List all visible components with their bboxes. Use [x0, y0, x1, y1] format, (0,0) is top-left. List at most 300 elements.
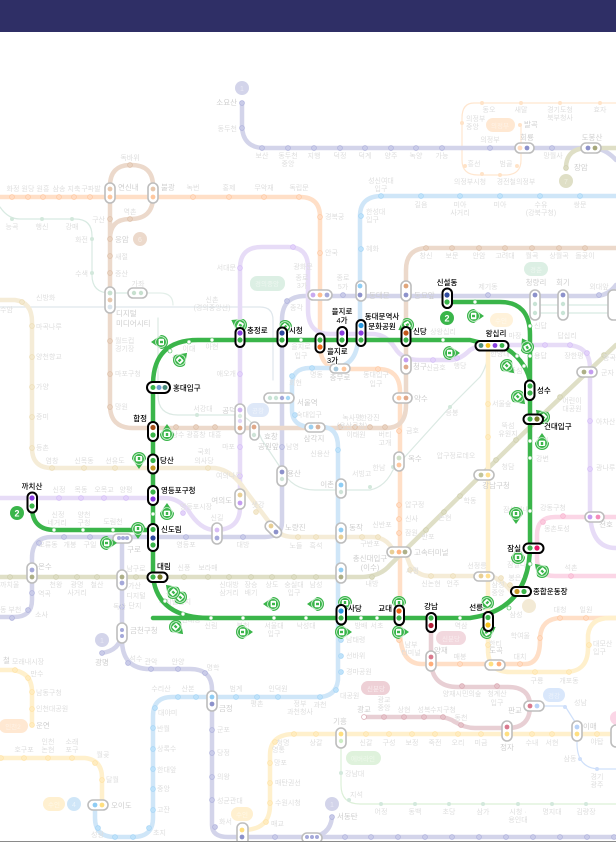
line 2 station names: 강남 — [424, 601, 438, 611]
faded station labels: 3가 — [297, 281, 308, 290]
faded station labels: 망포 — [274, 758, 287, 767]
faded station labels: 동작 — [349, 522, 363, 532]
faded station labels: 녹사평 — [342, 413, 362, 422]
faded station labels: 선정릉 — [467, 561, 487, 570]
faded station labels: 영등포시장 — [180, 502, 213, 511]
line 2 station names: 대림 — [157, 561, 171, 571]
faded station labels: 의왕 — [217, 772, 230, 781]
faded station labels: 상왕십리 — [430, 327, 456, 336]
faded station labels: 구청 — [78, 519, 90, 527]
faded station labels: (용산구청) — [337, 421, 367, 430]
faded line number badges and pills: 수인 — [236, 810, 248, 819]
faded station labels: 을지로 — [291, 342, 311, 351]
faded station labels: 중곡 — [603, 354, 616, 362]
faded station labels: 성균관대 — [217, 796, 243, 805]
faded line number badges and pills: 경강 — [548, 691, 560, 700]
faded station labels: 신촌 — [206, 295, 219, 304]
faded station labels: 증산 — [115, 269, 128, 278]
faded station labels: 망원 — [115, 402, 128, 411]
faded station labels: 학동 — [464, 496, 477, 505]
faded station labels: 신사 — [405, 514, 418, 523]
line 2 station names: 3가 — [327, 356, 338, 365]
faded station labels: 군포 — [217, 726, 230, 734]
faded station labels: 사거리 — [450, 208, 470, 217]
faded station labels: 보정 — [406, 738, 418, 747]
faded station labels: 광명 — [95, 657, 109, 667]
line 2 station names: 4가 — [336, 316, 348, 325]
faded station labels: 신대방 — [181, 615, 201, 624]
faded station labels: 수유 — [535, 201, 548, 209]
faded station labels: 보산 — [256, 151, 269, 160]
faded station labels: 모래내시장 — [12, 657, 45, 666]
faded station labels: 안암 — [473, 251, 486, 260]
line 2 station names — [22, 277, 572, 613]
faded station labels: 천호 — [599, 519, 613, 529]
line 2 main track — [32, 302, 530, 618]
faded station labels: 강변 — [536, 454, 549, 463]
faded station labels: 구파발 — [81, 184, 101, 193]
faded station labels: 입구 — [295, 352, 308, 360]
faded station labels: 논현 — [42, 746, 54, 754]
faded station labels: 창신 — [420, 251, 432, 260]
faded station labels: 학여울 — [511, 631, 531, 640]
bottom edge rule — [0, 841, 616, 842]
faded station labels: 화서 — [219, 817, 232, 826]
faded station labels: 도곡 — [489, 646, 503, 655]
faded station labels: 방배 — [355, 621, 367, 630]
faded station labels: 양평 — [120, 485, 132, 494]
faded station labels: 회룡 — [520, 133, 534, 142]
line 2 station names: 을지로 — [332, 307, 352, 316]
faded line number badges and pills: 공항 — [252, 406, 264, 415]
faded station labels: 봉천 — [237, 621, 249, 630]
faded station labels: 가능 — [436, 151, 449, 160]
faded station labels: 도림천 — [103, 517, 123, 526]
faded station labels: 오류동 — [38, 541, 58, 549]
faded station labels: 흑석 — [310, 541, 322, 550]
faded station labels: 숙대입구 — [296, 411, 322, 419]
line 2 station names: 당산 — [160, 455, 174, 465]
faded station labels: 독립문 — [289, 184, 309, 192]
faded station labels: 제기동 — [478, 282, 498, 291]
faded station labels: 약수 — [414, 393, 428, 403]
faded station labels: 서울역 — [297, 397, 318, 407]
faded station labels: 광명 — [71, 580, 83, 589]
faded station labels: 산본 — [182, 684, 195, 693]
faded station labels: 회현 — [289, 379, 302, 387]
faded station labels: 행당 — [454, 361, 467, 370]
faded station labels: 상록수 — [157, 744, 177, 753]
faded transfer stations — [27, 143, 616, 842]
faded station labels: 장한평 — [564, 351, 584, 360]
faded station labels: 구산 — [92, 215, 106, 224]
faded station labels: 어린이 — [562, 396, 582, 405]
faded station labels: 호구포 — [14, 746, 34, 754]
faded station labels: 중앙 — [492, 589, 505, 597]
faded station labels: 압구정로데오 — [437, 451, 476, 460]
faded station labels: 녹번 — [187, 183, 199, 192]
faded line number badges and pills: 4 — [72, 802, 76, 809]
faded station labels: 서울대 — [264, 621, 284, 630]
faded station labels: 동대입구 — [363, 371, 389, 379]
faded station labels: 중앙 — [378, 704, 391, 712]
faded station labels: 개포동 — [559, 676, 579, 685]
faded station labels: 강남대 — [345, 769, 364, 778]
faded station labels: 외대앞 — [589, 282, 609, 291]
faded station labels: 서강대 — [193, 404, 213, 413]
faded station labels: 신갈 — [360, 738, 373, 747]
faded station labels: 죽전 — [429, 738, 441, 747]
faded station labels: 청계산 — [487, 689, 507, 698]
faded station labels: 아차산 — [596, 417, 616, 426]
faded station labels: 용답 — [534, 351, 547, 360]
faded station labels: 역삼 — [455, 621, 468, 630]
faded station labels: 강동구청 — [540, 503, 566, 512]
header bar — [0, 0, 616, 32]
faded station labels: 홍제 — [223, 183, 235, 192]
faded station labels: 응봉 — [446, 409, 459, 417]
faded station labels: 이대 — [183, 344, 195, 353]
faded station labels: 석수 — [130, 654, 143, 663]
faded station labels: 신대방 — [219, 580, 239, 589]
faded station labels: 쌍문 — [574, 200, 587, 209]
faded station labels: 압구정 — [405, 500, 424, 509]
faded station labels: 신풍 — [178, 563, 191, 572]
faded station labels: 어정 — [375, 807, 387, 816]
faded line number badges and pills: 경춘 — [530, 265, 542, 274]
faded station labels: 대모산 — [593, 639, 613, 648]
faded station labels: 수지구청 — [430, 705, 456, 714]
faded station labels: 한양대 — [490, 350, 510, 358]
faded station labels: 사평 — [406, 566, 419, 575]
faded line number badges and pills: 경의중앙 — [255, 279, 279, 288]
faded station labels: 성복 — [418, 705, 431, 714]
faded station labels: 광흥창 — [186, 430, 206, 439]
faded station labels: 상수 — [172, 430, 185, 439]
faded station labels: 한남 — [373, 463, 386, 472]
faded station labels: 구로 — [166, 590, 179, 598]
faded station labels: 회기 — [556, 278, 570, 287]
faded station labels: 수원시청 — [275, 798, 301, 807]
line 2 station names: 잠실 — [507, 543, 521, 553]
faded station labels: 미금 — [475, 738, 488, 747]
faded station labels: 고잔 — [157, 805, 170, 814]
faded station labels: 남부 — [405, 640, 418, 649]
faded station labels: 인천대공원 — [36, 704, 68, 713]
faded station labels: 양천 — [78, 510, 90, 519]
line 2 badges: 2 — [444, 314, 450, 324]
faded line number badges and pills: 의정부 — [491, 121, 509, 130]
faded station labels: 청량리 — [526, 278, 546, 287]
faded station labels: 개봉 — [64, 540, 77, 549]
faded station labels: 신정 — [52, 510, 64, 519]
faded station labels: 종로 — [337, 274, 350, 282]
faded station labels: 동두천 — [218, 124, 237, 133]
line 2 station names: 시청 — [289, 326, 303, 335]
faded station labels: 원당 — [22, 184, 35, 193]
faded station labels: 삼각지 — [304, 433, 324, 443]
faded station labels: 낙성대 — [296, 621, 316, 630]
faded station labels: 대공원 — [340, 691, 359, 700]
faded station labels: 답십리 — [557, 331, 577, 340]
faded station labels: 과천 — [314, 700, 326, 709]
faded station labels: 한성대 — [366, 207, 385, 216]
line 2 station names: 신도림 — [161, 524, 182, 534]
faded station labels: 공덕 — [222, 405, 236, 415]
faded station labels: 마장 — [509, 331, 522, 340]
faded station labels: 명지대 — [542, 807, 562, 816]
faded station labels: 남성 — [310, 580, 322, 589]
faded station labels: 안국 — [325, 248, 338, 257]
faded station labels: 경기 — [591, 772, 603, 781]
faded station labels: 성신여대 — [368, 176, 394, 185]
faded station labels: 월곶 — [97, 750, 110, 759]
faded station labels: 일원 — [580, 605, 592, 614]
faded station labels: 충무로 — [330, 373, 350, 382]
faded station labels: 상월곡 — [549, 251, 569, 260]
faded station labels: 내방 — [366, 579, 379, 588]
faded station labels: 남동구청 — [36, 688, 62, 697]
faded station labels: 소사 — [35, 610, 48, 619]
faded station labels: 염창 — [46, 457, 59, 465]
faded station labels: 원흥 — [37, 184, 50, 193]
faded station labels: 언주 — [447, 579, 460, 588]
faded station labels: 월곡 — [526, 251, 539, 260]
faded station labels: 광나루 — [596, 463, 616, 472]
line 2 station names: 동대문역사 — [365, 311, 399, 321]
faded station labels: 까치울 — [0, 580, 20, 589]
faded station labels: 노량진 — [285, 522, 306, 532]
faded station labels: 뚝섬 — [510, 366, 522, 375]
faded station labels: 선유도 — [105, 456, 125, 465]
faded station labels: 상갈 — [310, 738, 323, 747]
faded station labels: 효창 — [264, 432, 278, 441]
faded station labels: 지행 — [308, 151, 320, 160]
faded station labels: 돌곶이 — [575, 251, 595, 260]
faded line number badges and pills: 1 — [100, 638, 104, 645]
faded station labels: 고속터미널 — [414, 548, 449, 557]
faded station labels: 입구 — [288, 589, 301, 597]
line 2 station names: 성수 — [537, 385, 551, 395]
faded station labels: 디지털단지 — [159, 597, 191, 606]
faded station labels: 도봉산 — [582, 132, 602, 142]
faded station labels: (경의중앙선) — [194, 303, 230, 312]
faded line number badges and pills: 에버라인 — [351, 754, 375, 763]
faded station labels: 포구 — [66, 746, 79, 754]
faded station labels: 마곡나루 — [36, 322, 62, 331]
line 2 station names: 홍대입구 — [173, 382, 201, 392]
faded station labels: 구룡 — [531, 677, 544, 685]
faded station labels: 서울숲 — [492, 399, 512, 408]
line 2 station names: 문화공원 — [368, 322, 396, 331]
faded station labels: 중앙 — [282, 160, 295, 168]
faded station labels: 논현 — [439, 514, 451, 522]
faded line number badges and pills: 수인 — [48, 800, 60, 809]
faded station labels: 총신대입구 — [353, 554, 387, 563]
faded station labels: 상현 — [398, 705, 410, 714]
faded station labels: 유원지 — [498, 429, 518, 438]
faded station labels: 신목동 — [74, 456, 94, 465]
faded station labels: (이수) — [361, 562, 380, 572]
faded station labels: 독산 — [113, 602, 126, 611]
faded station labels: 야탑 — [591, 737, 604, 746]
faded station labels: 동천 — [455, 713, 467, 722]
line 2 station names: 영등포구청 — [161, 485, 196, 495]
faded station labels: 뚝섬 — [502, 421, 514, 430]
faded station labels: 행신 — [36, 222, 48, 231]
faded station labels: 구성 — [383, 738, 395, 747]
faded station labels: (강북구청) — [526, 208, 556, 217]
faded station labels: 대야미 — [158, 708, 177, 717]
faded station labels: 미디어시티 — [116, 318, 150, 328]
faded station labels: 단지 — [129, 601, 141, 610]
faded station labels: 광화문 — [293, 263, 313, 271]
faded station labels: 역곡 — [38, 589, 51, 598]
faded station labels: 안양 — [172, 657, 185, 666]
line 2 badges: 2 — [14, 508, 20, 518]
faded station labels: 용산 — [287, 468, 301, 478]
faded station labels: 디지털 — [126, 591, 146, 600]
faded station labels: 평촌 — [251, 699, 264, 708]
faded station labels: 새절 — [115, 252, 128, 261]
faded station labels: 녹양 — [410, 152, 423, 160]
faded line number badges and pills: 7 — [564, 179, 568, 186]
faded station labels: 강매 — [66, 222, 78, 231]
faded station labels: 아현 — [206, 342, 218, 351]
transit pin icons — [100, 309, 553, 642]
faded station labels: 대방 — [237, 540, 250, 549]
faded station labels: 온수 — [38, 562, 52, 571]
line 2 small stations — [52, 300, 532, 620]
faded station labels: 네거리 — [47, 518, 67, 527]
faded station labels: 신림 — [205, 621, 217, 630]
faded station labels: 오이도 — [111, 800, 132, 810]
faded station labels: 지석 — [350, 790, 363, 799]
faded station labels: 반월 — [157, 724, 170, 733]
faded station labels: 한강진 — [360, 413, 380, 422]
faded station labels: 노들 — [290, 542, 303, 550]
faded station labels: 시청 · — [509, 808, 527, 816]
line 2 station names: 충정로 — [247, 325, 268, 335]
faded station labels: 서대문 — [217, 263, 237, 272]
faded station labels: 증미 — [36, 412, 49, 421]
faded station labels: 용인대 — [508, 815, 528, 824]
faded station labels: 이촌 — [320, 479, 334, 489]
faded station labels: 샛강 — [252, 500, 265, 509]
faded station labels: 서현 — [546, 738, 558, 747]
faded station labels: 군자 — [601, 368, 614, 377]
faded station labels: 터미널 — [401, 648, 421, 657]
faded station labels: 구로 — [127, 545, 141, 554]
faded station labels: 경복궁 — [325, 212, 345, 221]
faded station labels: 독바위 — [120, 153, 140, 162]
faded line number badges and pills: 신분당 — [367, 684, 385, 693]
faded station labels: 만수 — [31, 669, 44, 678]
faded station labels: 배기 — [245, 588, 257, 597]
faded station labels: 수암 — [0, 306, 13, 314]
faded station labels: 경기도청 — [547, 105, 573, 114]
faded station labels: 삼송 — [53, 184, 66, 193]
faded station labels: 매교 — [271, 820, 284, 828]
faded line number badges and pills: 1 — [240, 86, 244, 93]
line 2 station names: 신당 — [413, 326, 427, 336]
faded station labels: 신반포 — [372, 520, 392, 529]
faded station labels: 한대앞 — [157, 766, 177, 774]
faded station labels: 서동탄 — [337, 811, 358, 821]
faded station labels: 삼성 — [492, 580, 504, 589]
faded station labels: 목동 — [75, 486, 88, 494]
faded station labels: 신길 — [211, 513, 223, 522]
faded station labels: 의사당 — [194, 456, 214, 465]
faded station labels: 서초 — [371, 621, 384, 630]
faded station labels: 미아 — [454, 200, 467, 209]
faded station labels: 봉은사 — [508, 573, 528, 582]
faded station labels: 소래 — [66, 737, 78, 746]
faded station labels: 청구 — [413, 362, 427, 371]
faded station labels: 숭실대 — [284, 580, 304, 589]
faded station labels: 오리 — [452, 738, 464, 747]
faded station labels: 가양 — [36, 382, 49, 391]
faded station labels: 종로 — [296, 274, 309, 282]
faded station labels: 강남구청 — [482, 480, 510, 490]
faded station labels: 철산 — [91, 580, 104, 589]
faded station labels: 대공원 — [562, 404, 582, 413]
faded station labels: 이태원 — [346, 430, 366, 439]
line 2 station names: 선릉 — [469, 602, 483, 612]
faded station labels: 의정부 — [466, 114, 486, 123]
faded station labels: 인덕원 — [268, 684, 288, 693]
faded station labels: 서빙고 — [352, 469, 372, 478]
line 2 station names: 건대입구 — [544, 421, 572, 431]
faded station labels: 삼거리 — [219, 588, 239, 597]
faded station labels: 입구 — [370, 380, 383, 388]
faded station labels: 상도 — [266, 580, 279, 589]
faded station labels: 달월 — [106, 775, 119, 784]
faded station labels: 사거리 — [67, 588, 87, 597]
faded station labels: 잠원 — [405, 528, 418, 537]
faded station labels: 매봉 — [454, 653, 467, 661]
faded station labels: 신논현 — [421, 579, 441, 588]
faded station labels: 영등포 — [176, 540, 196, 549]
faded station labels: 동대문 — [369, 291, 390, 300]
faded station labels: 구의 — [536, 436, 549, 445]
faded station labels: 기흥 — [333, 716, 347, 726]
faded station labels: 동오 — [483, 106, 496, 114]
faded station labels: 입구 — [375, 185, 388, 193]
faded station labels: 화정 — [7, 184, 19, 193]
faded station labels: 범골 — [500, 159, 513, 168]
faded station labels: 옥수 — [408, 454, 422, 463]
faded station labels: 신정 — [53, 485, 65, 494]
faded line number badges and pills: 1 — [330, 802, 334, 809]
faded station labels: 역촌 — [124, 207, 137, 216]
faded station labels: 중앙 — [466, 123, 479, 131]
faded station labels: 남태령 — [346, 635, 365, 644]
faded station labels: 매탄권선 — [275, 778, 301, 787]
faded station labels: 양재 — [434, 646, 448, 655]
faded station labels: 인천 — [42, 737, 54, 746]
faded station labels: 신금호 — [426, 363, 446, 372]
faded station labels: 망월사 — [543, 151, 563, 160]
faded station labels: 한티 — [489, 639, 502, 648]
faded station labels: 덕계 — [359, 151, 371, 160]
faded station labels: 신답 — [534, 321, 547, 330]
faded station labels: 반포 — [422, 532, 435, 541]
faded station labels: 월드컵 — [115, 336, 134, 345]
faded station labels: 동백 — [409, 807, 421, 816]
line 2 station names: 사당 — [348, 603, 362, 613]
line 2 station names: 왕십리 — [486, 328, 506, 338]
